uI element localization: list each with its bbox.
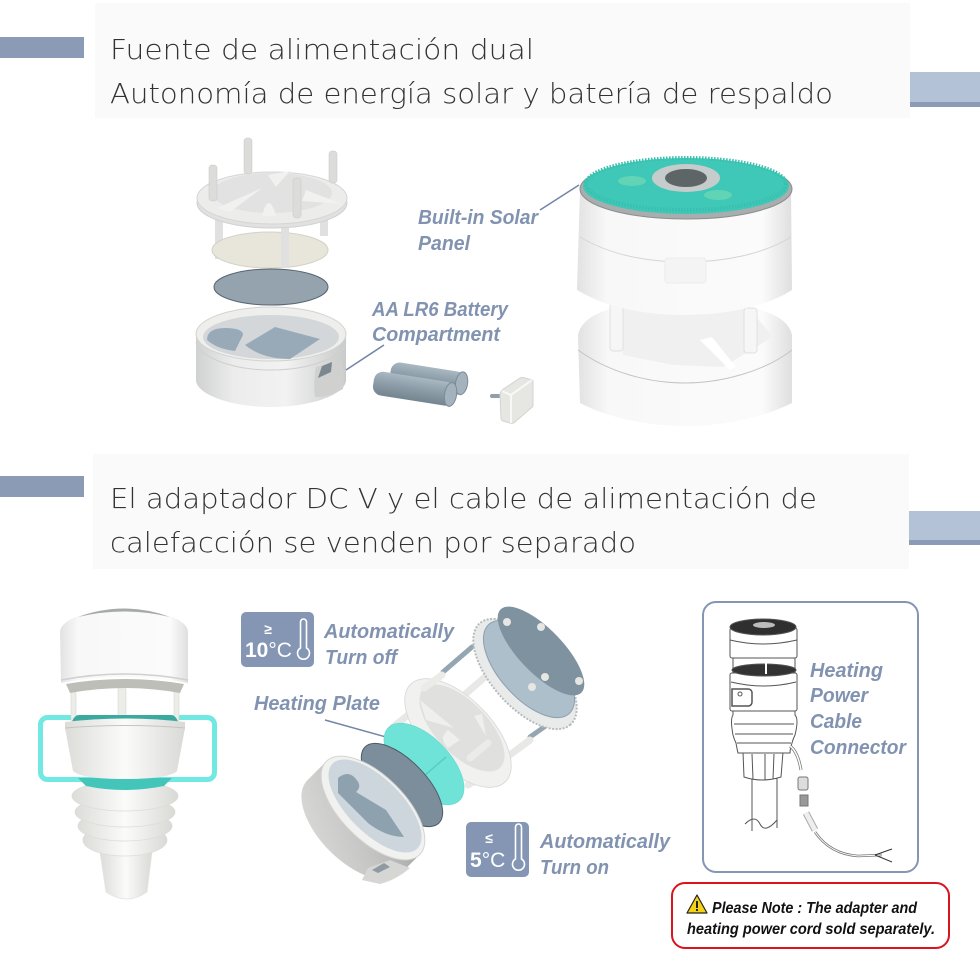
top plate <box>197 138 347 228</box>
rods <box>393 647 547 785</box>
teal heating plate <box>370 709 478 819</box>
posts <box>71 686 179 722</box>
batteries <box>372 361 469 407</box>
badge: turn off temperature: 10°C <box>245 639 292 662</box>
grey disc <box>214 269 328 305</box>
label: solar panel: Panel <box>418 233 470 255</box>
label: heating power cable connector: Cable <box>810 711 862 733</box>
lower posts <box>215 215 328 259</box>
label: heating power cable connector: Heating <box>810 660 883 682</box>
gear fringe <box>66 679 184 693</box>
badge: turn off temperature <box>241 612 314 667</box>
diagram: exploded solar module <box>196 138 533 423</box>
heading: dual power supply: Fuente de alimentación dual <box>110 33 534 66</box>
callout: please note <box>672 883 949 948</box>
icon: thermometer <box>298 619 310 659</box>
louvers <box>72 781 178 856</box>
icon: thermometer <box>512 824 524 870</box>
icon: warning triangle <box>687 895 707 913</box>
label: automatically turn off: Automatically <box>323 621 455 643</box>
top disc pegs <box>503 618 583 691</box>
heading: solar autonomy: Autonomía de energía solar y batería de respaldo <box>110 77 833 110</box>
battery cover <box>490 378 533 423</box>
callout: please note: heating power cord sold separately. <box>687 921 935 938</box>
label: battery compartment: AA LR6 Battery <box>371 299 509 321</box>
support posts <box>610 303 757 353</box>
callout: please note: Please Note : The adapter and <box>712 900 917 917</box>
teal mid plate <box>72 715 178 722</box>
paper plate <box>212 232 328 268</box>
panel: header one <box>0 3 980 118</box>
label: solar panel <box>418 185 579 255</box>
upper housing <box>577 190 792 315</box>
label: heating plate: Heating Plate <box>254 693 380 715</box>
label: heating power cable connector: Connector <box>810 737 907 759</box>
badge: turn on temperature <box>466 822 529 877</box>
grey top disc <box>485 594 597 708</box>
lower housing <box>578 307 792 426</box>
heading: sold separately: calefacción se venden por separado <box>110 526 636 559</box>
label: automatically turn on: Automatically <box>539 831 671 853</box>
photo: solar sensor head <box>577 158 792 426</box>
photo: weather station <box>40 608 214 899</box>
label: automatically turn on: Turn on <box>540 857 609 879</box>
line drawing: station with cable <box>730 619 797 831</box>
heating housing <box>65 718 185 779</box>
badge: turn on temperature: 5°C <box>470 849 505 872</box>
badge: turn off temperature: ≥ <box>264 621 272 637</box>
label: automatically turn on <box>539 831 671 879</box>
label: automatically turn off: Turn off <box>325 647 399 669</box>
label: heating plate <box>254 693 386 737</box>
label: battery compartment <box>346 299 509 370</box>
heading: adapter: El adaptador DC V y el cable de alimentación de <box>110 482 817 515</box>
lower post over plate <box>281 228 289 268</box>
panel: header two <box>0 454 980 569</box>
base housing <box>283 739 442 898</box>
lens ring <box>652 164 720 192</box>
label: battery compartment: Compartment <box>372 324 501 346</box>
label: automatically turn off <box>323 621 455 669</box>
battery housing <box>196 307 346 407</box>
gear housing <box>455 601 595 747</box>
solar top <box>580 159 792 219</box>
stem <box>100 852 152 899</box>
top cylinder <box>60 609 188 683</box>
grey disc <box>348 730 456 840</box>
diagram: exploded heating assembly <box>283 594 597 898</box>
label: heating power cable connector: Power <box>810 685 869 707</box>
white plate <box>386 660 530 806</box>
badge: turn on temperature: ≤ <box>485 830 493 846</box>
panel: heating cable connector <box>703 602 918 872</box>
label: heating power cable connector <box>810 660 907 759</box>
cable <box>790 746 892 862</box>
cyan highlight frame <box>40 718 214 780</box>
label: solar panel: Built-in Solar <box>418 207 539 229</box>
